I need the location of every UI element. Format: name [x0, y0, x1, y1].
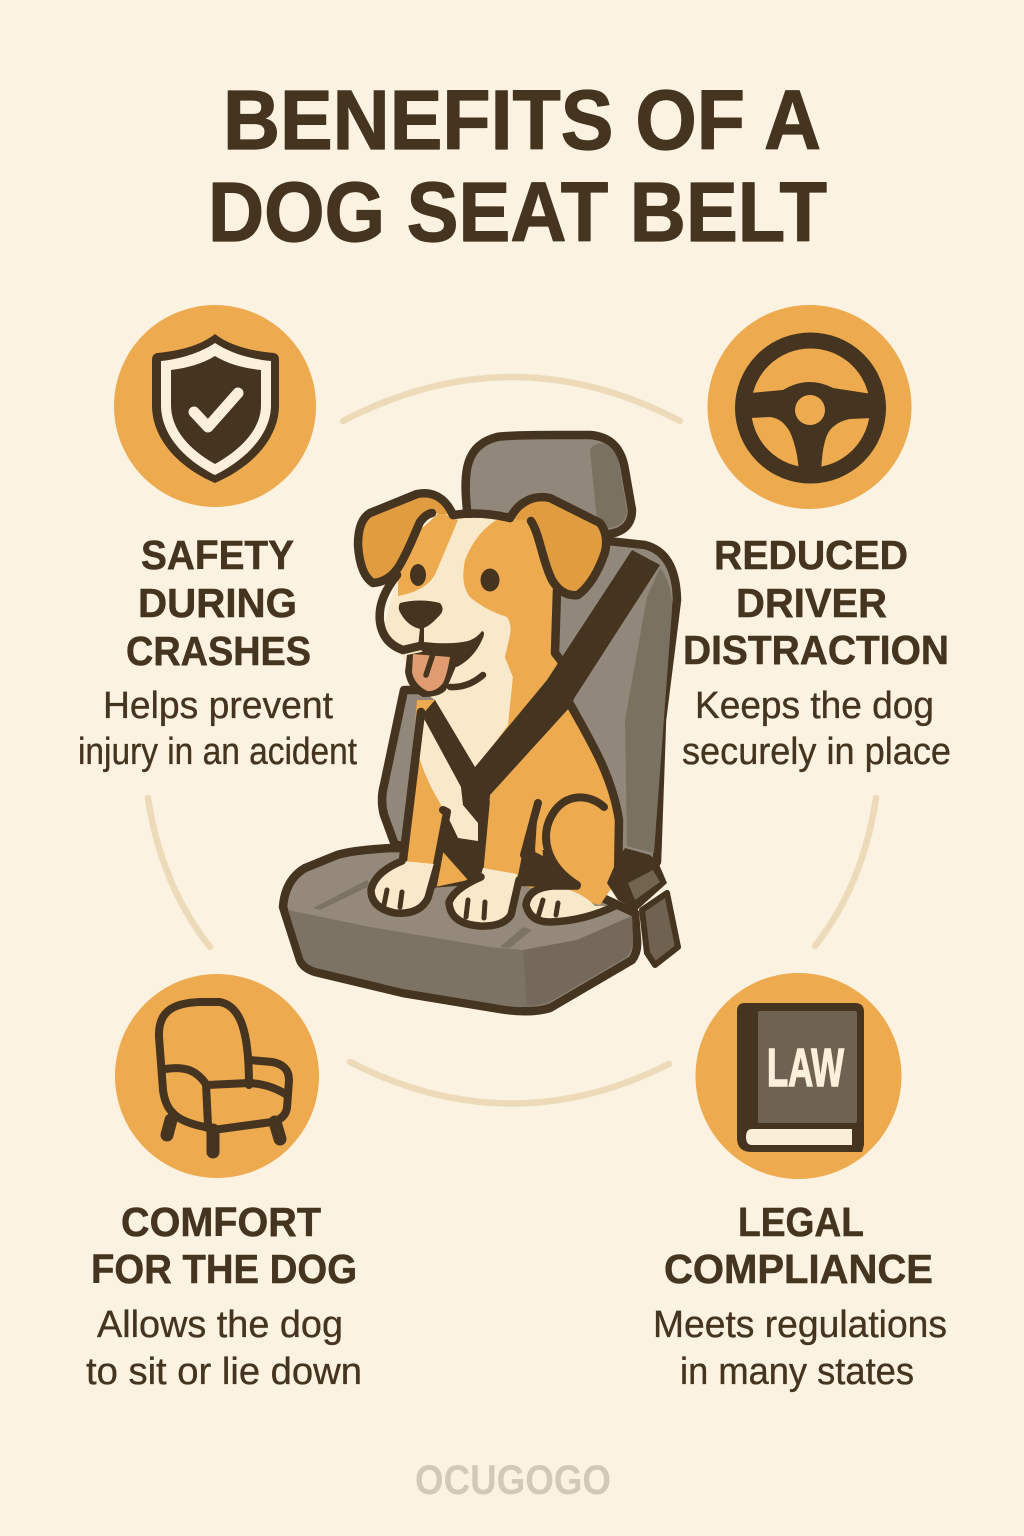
- orange eye patch: [398, 512, 458, 596]
- text: comfort for the dog: [86, 1199, 362, 1393]
- icon: armchair: [115, 974, 319, 1178]
- text: legal compliance: in many states: [680, 1351, 914, 1393]
- central illustration: dog on car seat: [283, 435, 678, 1011]
- text: legal compliance: COMPLIANCE: [664, 1246, 933, 1292]
- text: safety during crashes: Helps prevent: [103, 685, 333, 727]
- text: comfort for the dog: COMFORT: [121, 1199, 321, 1245]
- eyes: [410, 564, 426, 586]
- text: reduced driver distraction: REDUCED: [714, 532, 908, 578]
- icon: law book: [696, 973, 902, 1179]
- text: reduced driver distraction: [682, 532, 951, 773]
- icon: law book: LAW: [767, 1038, 844, 1098]
- text: safety during crashes: SAFETY: [141, 532, 294, 578]
- right ear: [510, 497, 606, 595]
- text: legal compliance: Meets regulations: [653, 1304, 947, 1346]
- text: legal compliance: [653, 1199, 947, 1393]
- title: DOG SEAT BELT: [208, 165, 827, 259]
- body outline: [570, 704, 619, 880]
- chin line: [450, 675, 483, 687]
- toes: [384, 890, 558, 918]
- icon: shield with check: [114, 305, 316, 507]
- tongue: [405, 648, 457, 697]
- mouth: [418, 628, 484, 667]
- left ear: [358, 493, 453, 583]
- text: reduced driver distraction: DISTRACTION: [683, 627, 949, 673]
- rear shadow: [516, 805, 578, 888]
- watermark: OCUGOGO: [415, 1456, 611, 1503]
- connecting arcs: [148, 377, 876, 1104]
- text: safety during crashes: DURING: [138, 580, 297, 626]
- text: reduced driver distraction: Keeps the dog: [695, 685, 934, 727]
- paw: rear: [526, 886, 617, 922]
- dog body: [403, 660, 620, 905]
- seat belt buckle: [607, 848, 678, 965]
- front paw right: [449, 868, 519, 926]
- hind leg outline: [546, 797, 604, 885]
- dog head outlines: [380, 514, 562, 662]
- text: comfort for the dog: FOR THE DOG: [91, 1246, 357, 1292]
- seat cushion: [283, 848, 637, 1011]
- text: safety during crashes: injury in an acident: [78, 731, 357, 773]
- orange neck patch: [463, 518, 558, 726]
- front paw left: [371, 861, 437, 913]
- headrest: [466, 435, 632, 534]
- text: reduced driver distraction: securely in place: [682, 731, 951, 773]
- foreleg cream strip: [417, 712, 480, 842]
- title: BENEFITS OF A: [223, 73, 821, 167]
- seat belt strap: [422, 550, 660, 872]
- backrest shading: [625, 568, 672, 853]
- car seat backrest: [382, 541, 677, 862]
- lap shadow: [430, 800, 490, 888]
- text: safety during crashes: [78, 532, 357, 773]
- text: reduced driver distraction: DRIVER: [736, 580, 887, 626]
- text: legal compliance: LEGAL: [738, 1199, 864, 1245]
- dog cream face and chest: [383, 518, 558, 770]
- text: comfort for the dog: Allows the dog: [97, 1304, 343, 1346]
- icon: steering wheel: [708, 305, 912, 509]
- leg outer line: [403, 712, 421, 860]
- title: [208, 73, 827, 259]
- text: comfort for the dog: to sit or lie down: [86, 1351, 362, 1393]
- nose: [399, 600, 443, 629]
- text: safety during crashes: CRASHES: [126, 628, 311, 674]
